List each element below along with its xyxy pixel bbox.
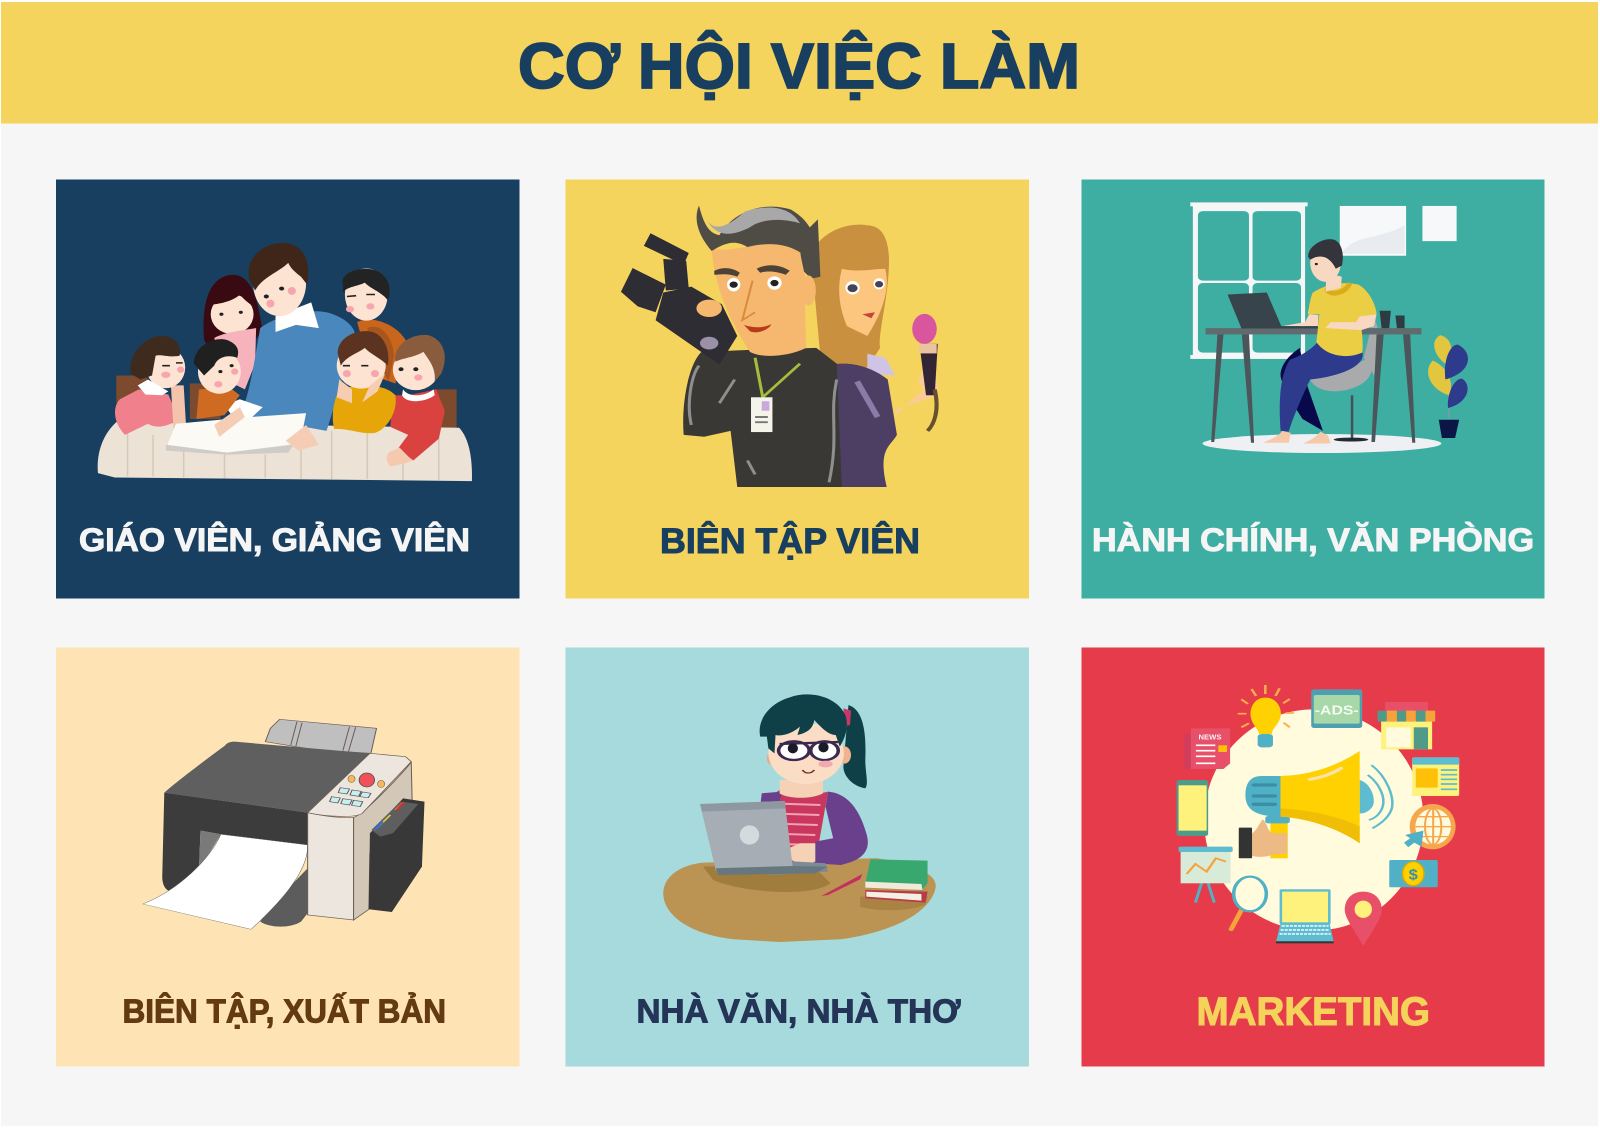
label: GIÁO VIÊN, GIẢNG VIÊN bbox=[79, 522, 470, 558]
plant bbox=[1428, 335, 1468, 438]
laptop bbox=[1228, 293, 1282, 328]
desk bbox=[1206, 328, 1421, 443]
wall pictures bbox=[1340, 206, 1457, 256]
header band bbox=[1, 2, 1598, 124]
cameraman bbox=[621, 206, 842, 487]
window bbox=[1190, 202, 1308, 359]
illustration: printer bbox=[143, 719, 424, 929]
panel: nhà văn, nhà thơ bbox=[566, 648, 1029, 1066]
illustration: office worker at desk bbox=[1190, 202, 1468, 453]
megaphone bbox=[1239, 751, 1392, 858]
illustration: girl writing on laptop bbox=[663, 694, 936, 942]
illustration: teacher reading with children bbox=[98, 243, 472, 481]
label: BIÊN TẬP, XUẤT BẢN bbox=[122, 992, 446, 1030]
icon: ads board bbox=[1311, 689, 1362, 728]
title: CƠ HỘI VIỆC LÀM bbox=[518, 29, 1080, 102]
panel: biên tập, xuất bản bbox=[56, 648, 520, 1066]
label: NHÀ VĂN, NHÀ THƠ bbox=[636, 992, 961, 1030]
cups bbox=[1380, 311, 1405, 328]
icon: globe bbox=[1404, 804, 1456, 849]
icon: magnifier bbox=[1231, 877, 1266, 929]
worker bbox=[1263, 239, 1377, 444]
icon: smartphone bbox=[1177, 780, 1208, 836]
illustration: megaphone with marketing icons bbox=[1177, 685, 1459, 946]
camera bbox=[621, 233, 737, 364]
label: HÀNH CHÍNH, VĂN PHÒNG bbox=[1092, 522, 1534, 558]
panel: hành chính, văn phòng bbox=[1082, 180, 1544, 598]
icon: banknote bbox=[1389, 860, 1438, 887]
chair bbox=[1310, 316, 1382, 442]
icon: banknote: $ bbox=[1409, 867, 1418, 883]
label: BIÊN TẬP VIÊN bbox=[660, 521, 920, 561]
central circle bbox=[1204, 709, 1423, 931]
icon: location pin bbox=[1345, 892, 1382, 946]
floor bbox=[1203, 434, 1441, 453]
panel: giáo viên, giảng viên bbox=[56, 180, 520, 598]
icon: ads board: -ADS- bbox=[1315, 702, 1359, 718]
panel: marketing bbox=[1082, 648, 1544, 1066]
woman reporter bbox=[811, 225, 938, 487]
icon: news bbox=[1184, 728, 1230, 769]
label: MARKETING bbox=[1196, 990, 1430, 1034]
icon: chart board bbox=[1179, 847, 1233, 903]
icon: browser bbox=[1412, 757, 1459, 796]
illustration: reporter and cameraman bbox=[621, 206, 938, 487]
panel: biên tập viên bbox=[566, 180, 1029, 598]
icon: shop bbox=[1378, 702, 1435, 749]
icon: light bulb bbox=[1238, 685, 1294, 747]
icon: laptop bbox=[1276, 889, 1334, 943]
icon: news: NEWS bbox=[1198, 733, 1221, 742]
